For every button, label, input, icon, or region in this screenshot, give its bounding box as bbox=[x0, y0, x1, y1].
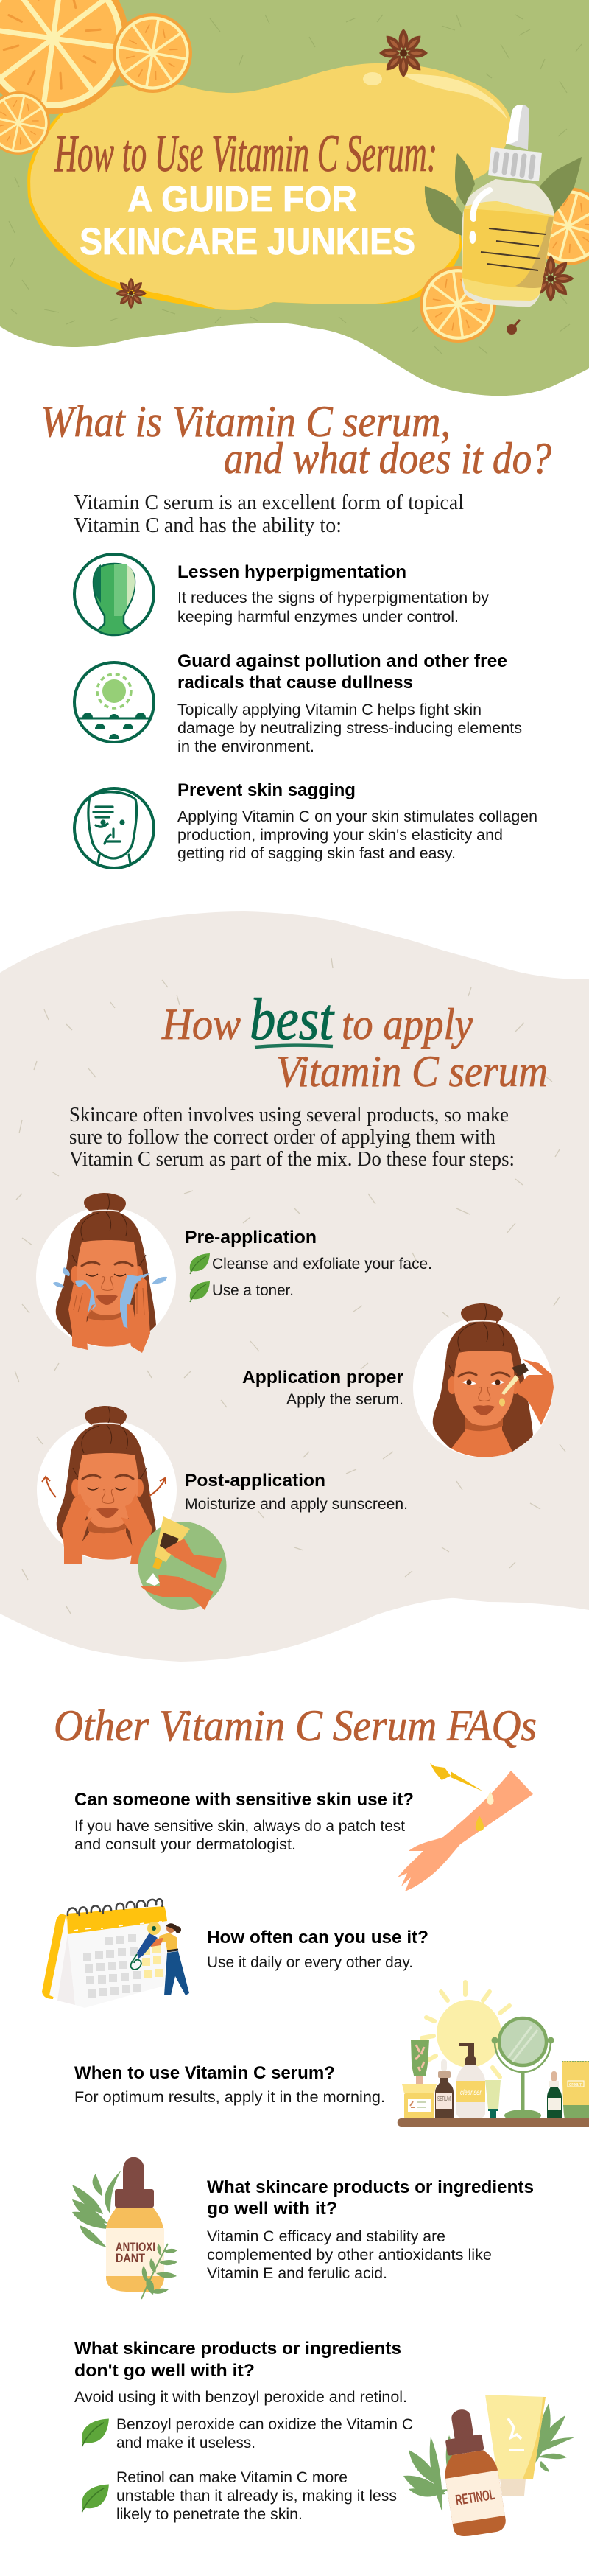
section 1 title bbox=[40, 397, 551, 483]
step 2 text: Application proper bbox=[242, 1368, 403, 1387]
step 2 text: Apply the serum. bbox=[286, 1391, 403, 1408]
bullet leaf 2 bbox=[82, 2484, 109, 2512]
item 2 text: Guard against pollution and other free bbox=[177, 651, 507, 671]
icon: pollution shield bbox=[74, 662, 154, 742]
FAQ 4 text: Vitamin E and ferulic acid. bbox=[207, 2265, 387, 2282]
section 1 title: What is Vitamin C serum, bbox=[40, 397, 451, 446]
bullet text 1 bbox=[116, 2416, 413, 2451]
bullet text 2: unstable than it already is, making it less bbox=[116, 2488, 397, 2505]
section 2 intro: Skincare often involves using several products, so make bbox=[69, 1104, 509, 1127]
section 1 intro: Vitamin C and has the ability to: bbox=[74, 514, 342, 537]
item 2 text bbox=[177, 651, 522, 755]
bullet text 2: likely to penetrate the skin. bbox=[116, 2506, 303, 2523]
header orange right bbox=[521, 178, 589, 274]
item 2 text: in the environment. bbox=[177, 738, 314, 755]
FAQ 5 text: What skincare products or ingredients bbox=[74, 2339, 401, 2359]
bullet text 1: and make it useless. bbox=[116, 2435, 255, 2451]
item 3 text: production, improving your skin's elasticity and bbox=[177, 827, 503, 844]
FAQ 1 text: Can someone with sensitive skin use it? bbox=[74, 1790, 414, 1810]
illustration: antioxidant bottle with leaves: ANTIOXI bbox=[116, 2240, 155, 2254]
step 3 text: Post-application bbox=[185, 1471, 325, 1491]
section 2 texture specks bbox=[15, 958, 565, 1614]
section 1 intro: Vitamin C serum is an excellent form of topical bbox=[74, 491, 464, 514]
item 3 text: Prevent skin sagging bbox=[177, 780, 356, 800]
illustration: woman applying serum bbox=[413, 1303, 554, 1457]
FAQ 4 text: complemented by other antioxidants like bbox=[207, 2247, 492, 2264]
header texture specks bbox=[9, 15, 582, 354]
item 1 text: keeping harmful enzymes under control. bbox=[177, 609, 459, 626]
step 1 heading and list: Pre-application bbox=[185, 1228, 317, 1247]
step 3 text: Moisturize and apply sunscreen. bbox=[185, 1496, 408, 1513]
section 2 title: best bbox=[250, 987, 335, 1052]
FAQ 5 text: don't go well with it? bbox=[74, 2361, 255, 2381]
section 2 title bbox=[161, 987, 548, 1096]
FAQ 4 text bbox=[207, 2177, 534, 2282]
step 3 text bbox=[185, 1471, 408, 1513]
icon: hyperpigmentation head bbox=[74, 554, 154, 635]
illustration: shelf with products, sun and mirror: cream bbox=[569, 2082, 582, 2087]
FAQ 2 text: How often can you use it? bbox=[207, 1928, 428, 1947]
section 2 title: to apply bbox=[342, 1000, 473, 1049]
star anise top bbox=[379, 29, 428, 77]
FAQ 4 text: What skincare products or ingredients bbox=[207, 2177, 534, 2197]
header title line 2: A GUIDE FOR bbox=[127, 180, 357, 220]
header orange bottom bbox=[415, 261, 501, 348]
section 2 intro: sure to follow the correct order of applying them with bbox=[69, 1126, 495, 1149]
step 1 heading and list bbox=[185, 1228, 432, 1302]
header green wave background bbox=[0, 0, 589, 396]
section 2 intro bbox=[69, 1104, 515, 1171]
illustration: woman with moisturizer bbox=[37, 1406, 177, 1564]
section 1 intro bbox=[74, 491, 464, 537]
icon: sagging face bbox=[74, 788, 154, 868]
illustration: calendar with person bbox=[42, 1899, 189, 2008]
illustration: shelf with products, sun and mirror: cleanser bbox=[460, 2089, 482, 2097]
illustration: woman washing face bbox=[36, 1193, 176, 1353]
clove bbox=[507, 320, 520, 335]
item 1 text: It reduces the signs of hyperpigmentation by bbox=[177, 589, 490, 606]
FAQ 1 text: and consult your dermatologist. bbox=[74, 1836, 296, 1853]
section 2 intro: Vitamin C serum as part of the mix. Do these four steps: bbox=[69, 1148, 515, 1171]
header yellow blob bbox=[30, 63, 511, 310]
FAQ 2 text bbox=[207, 1928, 428, 1971]
section 2 title: Vitamin C serum bbox=[276, 1047, 548, 1096]
header oranges top left bbox=[0, 0, 199, 161]
illustration: shelf with products, sun and mirror: SERUM bbox=[437, 2096, 451, 2102]
bullet leaf 1 bbox=[82, 2418, 109, 2446]
item 2 text: radicals that cause dullness bbox=[177, 673, 413, 693]
item 3 text bbox=[177, 780, 537, 862]
FAQ 3 text: When to use Vitamin C serum? bbox=[74, 2063, 335, 2083]
step 1 heading and list: Use a toner. bbox=[212, 1282, 294, 1299]
item 3 text: getting rid of sagging skin fast and easy. bbox=[177, 845, 456, 862]
star anise bottom left bbox=[116, 278, 147, 309]
illustration: antioxidant bottle with leaves: DANT bbox=[116, 2251, 146, 2265]
serum bottle with leaves bbox=[425, 105, 582, 307]
FAQ 3 text: For optimum results, apply it in the morning. bbox=[74, 2089, 385, 2106]
FAQ 3 text bbox=[74, 2063, 385, 2106]
FAQ 2 text: Use it daily or every other day. bbox=[207, 1954, 413, 1971]
item 2 text: Topically applying Vitamin C helps fight skin bbox=[177, 701, 482, 718]
bullet text 1: Benzoyl peroxide can oxidize the Vitamin C bbox=[116, 2416, 413, 2433]
step 2 text bbox=[242, 1368, 403, 1408]
section 3 title: Other Vitamin C Serum FAQs bbox=[54, 1701, 537, 1750]
illustration: antioxidant bottle with leaves bbox=[72, 2157, 177, 2299]
item 1 text: Lessen hyperpigmentation bbox=[177, 562, 406, 582]
item 3 text: Applying Vitamin C on your skin stimulates collagen bbox=[177, 808, 537, 825]
header title line 3: SKINCARE JUNKIES bbox=[80, 220, 415, 262]
FAQ 4 text: go well with it? bbox=[207, 2199, 337, 2219]
FAQ 5 text: Avoid using it with benzoyl peroxide and retinol. bbox=[74, 2389, 407, 2406]
blob highlight bbox=[363, 72, 507, 119]
bullet text 2: Retinol can make Vitamin C more bbox=[116, 2469, 348, 2486]
FAQ 4 text: Vitamin C efficacy and stability are bbox=[207, 2228, 445, 2245]
illustration: shelf with products, sun and mirror bbox=[398, 1982, 589, 2127]
section 1 title: and what does it do? bbox=[224, 434, 551, 483]
illustration: arm with dropper bbox=[398, 1763, 533, 1891]
bullet text 2 bbox=[116, 2469, 397, 2523]
illustration: hands with sunscreen tube bbox=[138, 1516, 227, 1610]
FAQ 1 text bbox=[74, 1790, 414, 1853]
header yellow blob shadow bbox=[27, 71, 511, 310]
item 2 text: damage by neutralizing stress-inducing elements bbox=[177, 720, 522, 737]
item 1 text bbox=[177, 562, 490, 626]
illustration: retinol bottle, tube and leaves: RETINOL bbox=[454, 2487, 496, 2509]
illustration: retinol bottle, tube and leaves bbox=[403, 2395, 574, 2538]
star anise right bbox=[528, 256, 574, 301]
section 2 title: How bbox=[161, 1000, 241, 1049]
FAQ 1 text: If you have sensitive skin, always do a patch test bbox=[74, 1818, 405, 1835]
section 2 beige background bbox=[0, 911, 589, 1662]
FAQ 5 text bbox=[74, 2339, 407, 2406]
step 1 heading and list: Cleanse and exfoliate your face. bbox=[212, 1256, 432, 1273]
